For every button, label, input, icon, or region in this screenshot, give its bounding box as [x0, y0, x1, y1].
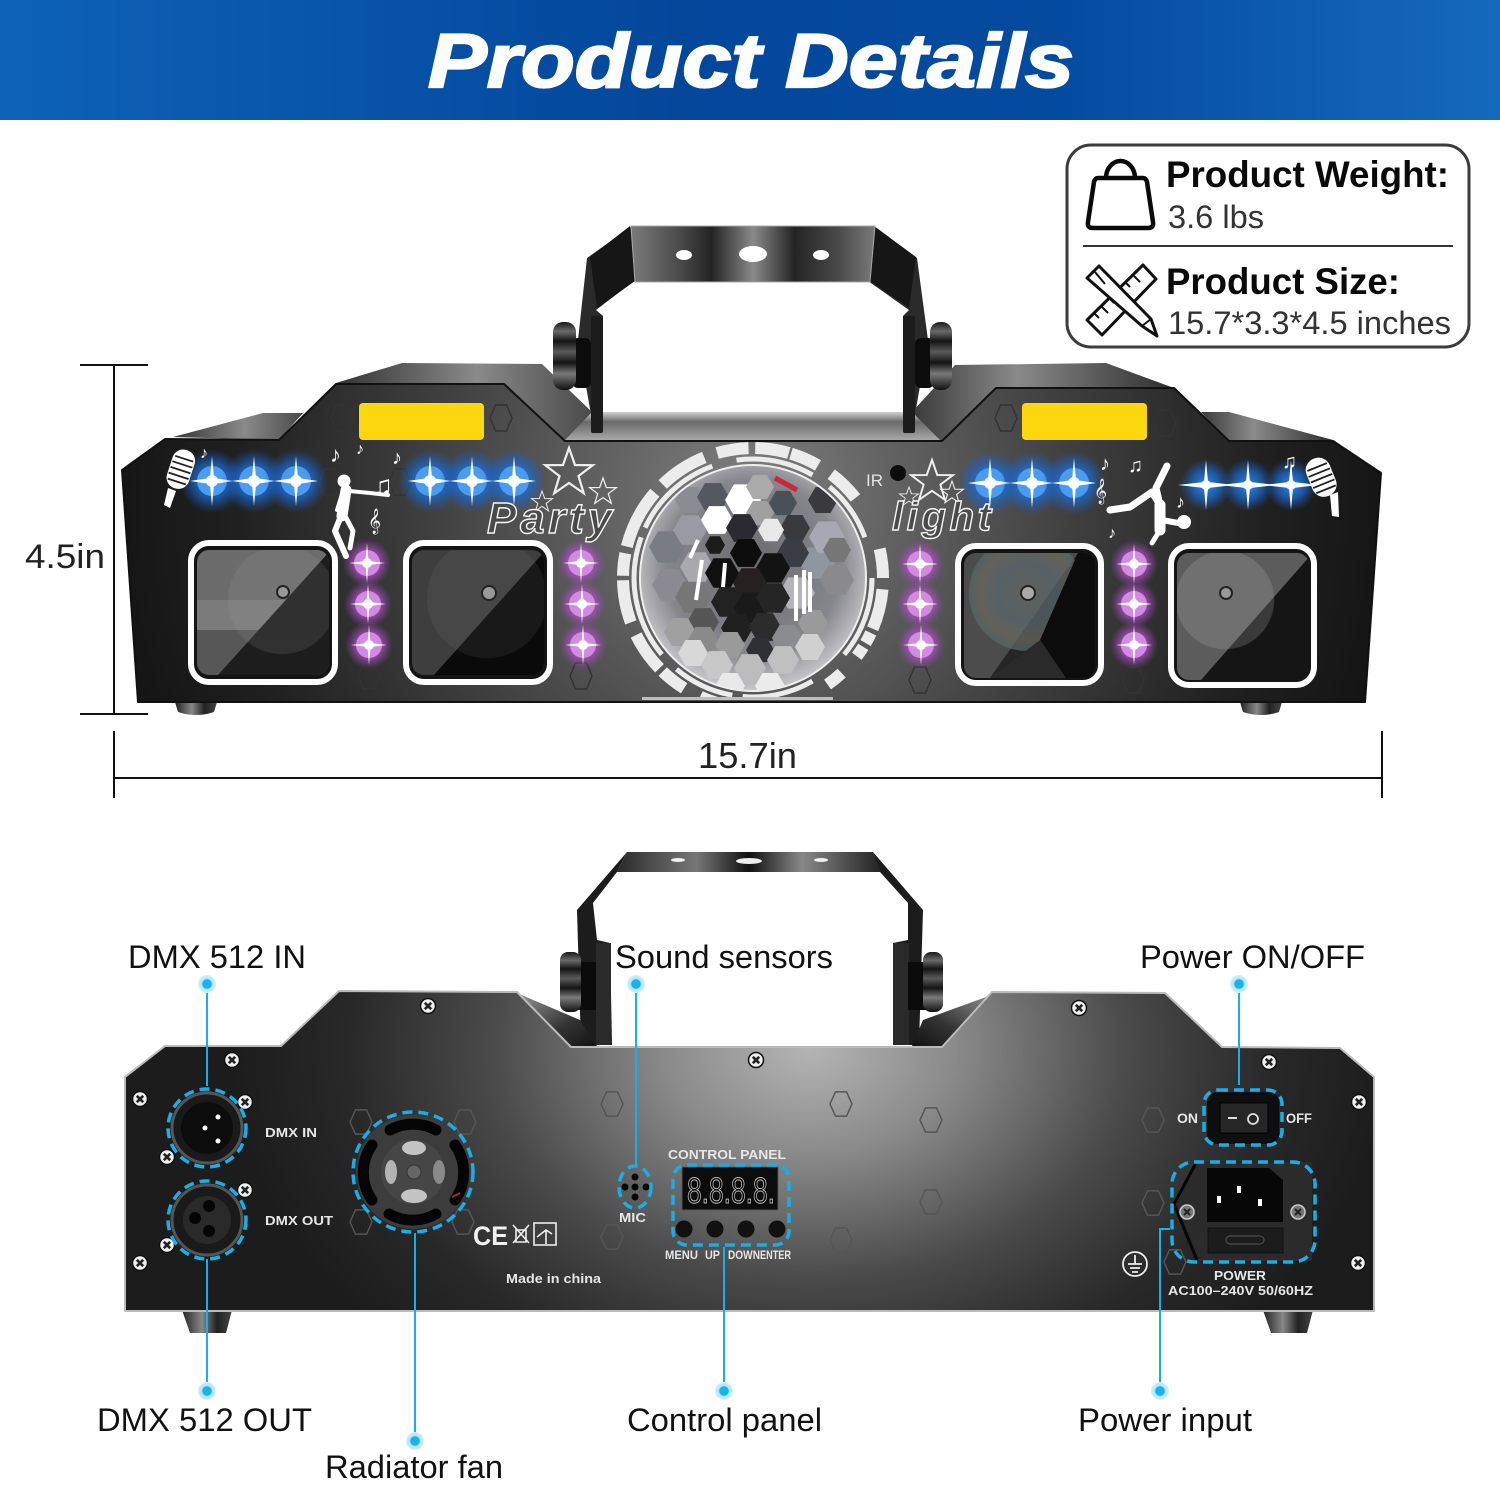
feet [175, 702, 1282, 715]
rear panel [125, 991, 1374, 1311]
rear view of light [125, 852, 1374, 1333]
knobs [553, 322, 952, 390]
icon: dancer [335, 474, 388, 556]
dimension: height [25, 365, 148, 714]
icon: music notes group: 𝄞 [368, 508, 381, 534]
callout lines [207, 984, 1239, 1441]
rear side wedges [517, 993, 997, 1047]
icon: music notes group: ♫ [1128, 455, 1143, 477]
control buttons [676, 1220, 786, 1238]
icon: music notes group: 𝄞 [1094, 478, 1107, 504]
text: power rating [1168, 1268, 1313, 1298]
connector: DMX in [172, 1093, 242, 1163]
party decoration: right [866, 451, 1340, 543]
icon: weight [1088, 161, 1153, 228]
mounting bracket [577, 852, 923, 1045]
icon: music notes group: ♫ [1282, 451, 1297, 473]
power inlet [1174, 1162, 1312, 1261]
knobs [560, 952, 943, 1012]
icon: music notes group: ♪ [1176, 492, 1185, 512]
icon: music notes group: ♪ [1108, 525, 1116, 542]
text: ON: ON [1177, 1110, 1198, 1126]
icon: music notes group: ♪ [356, 441, 364, 458]
text: weight value: 3.6 lbs [1168, 199, 1264, 235]
text: control panel: CONTROL PANEL [668, 1147, 786, 1162]
screws [132, 998, 1366, 1270]
disco ball rings [623, 448, 883, 708]
button labels: ENTER [760, 1248, 791, 1262]
label: power on/off: Power ON/OFF [1140, 939, 1365, 975]
front view of light [122, 226, 1381, 715]
blue LEDs [180, 449, 1319, 515]
title: Product Details [428, 19, 1074, 104]
lens window 3 [958, 535, 1101, 683]
top side surfaces [173, 316, 1333, 442]
icon: music notes group: ♫ [372, 470, 393, 501]
dimension: width [114, 731, 1382, 798]
faint hex decorations [350, 1092, 1186, 1274]
icon: dancer [1110, 466, 1191, 543]
icon: microphone [1302, 454, 1340, 517]
text: power rating: AC100–240V 50/60HZ [1168, 1283, 1313, 1298]
text: height value: 4.5in [25, 538, 105, 576]
lens window 2 [406, 538, 550, 682]
label: DMX 512 OUT: DMX 512 OUT [97, 1402, 312, 1438]
bottom bar [642, 697, 833, 700]
label: radiator fan: Radiator fan [325, 1449, 503, 1485]
power switch [1207, 1092, 1279, 1144]
callout dots [198, 975, 1248, 1450]
icon: ground symbol [1123, 1252, 1147, 1276]
text: size value: 15.7*3.3*4.5 inches [1168, 305, 1451, 341]
icon: music notes: ♪ [200, 445, 208, 462]
text: light: light [892, 495, 993, 539]
label: sound sensors: Sound sensors [615, 939, 833, 975]
IR sensor [890, 465, 906, 481]
party decoration: left [164, 441, 616, 556]
display: digits [682, 1167, 778, 1211]
button labels [665, 1248, 791, 1262]
feet [182, 1310, 1313, 1333]
icon: music notes group [330, 441, 402, 534]
label: power input: Power input [1078, 1402, 1252, 1438]
icon: music notes group [1094, 451, 1297, 542]
mounting bracket [578, 226, 928, 432]
button labels: DOWN [728, 1248, 760, 1262]
text: width value: 15.7in [698, 735, 797, 776]
panel: product specifications [1067, 145, 1469, 347]
text: OFF: OFF [1286, 1110, 1312, 1126]
display: digits: 8.8.8.8. [687, 1170, 775, 1211]
icon: music notes group: ♪ [392, 447, 402, 469]
text: made in china: Made in china [506, 1271, 602, 1286]
text: DMX OUT: DMX OUT [265, 1213, 333, 1228]
connector: DMX out [172, 1185, 242, 1255]
text: product size heading: Product Size: [1166, 261, 1400, 302]
lens window 4 [1171, 546, 1314, 685]
icon: music notes group: ♪ [1100, 453, 1110, 475]
front face panel [122, 384, 1381, 702]
yellow strobe bars [359, 403, 1147, 440]
text: MIC: MIC [619, 1210, 647, 1225]
text: DMX IN: DMX IN [265, 1125, 317, 1140]
label: DMX 512 IN: DMX 512 IN [128, 939, 306, 975]
icon: ruler and pencil [1087, 265, 1157, 336]
faint hex decorations [319, 405, 1176, 693]
disco ball [640, 465, 866, 699]
icon: compliance marks [513, 1223, 556, 1245]
text: product weight heading: Product Weight: [1166, 154, 1449, 195]
text: power rating: POWER [1214, 1268, 1267, 1283]
icon: microphone holes [622, 1174, 650, 1200]
button labels: MENU [665, 1248, 698, 1262]
purple LEDs [343, 539, 1158, 669]
text: Party: Party [487, 494, 615, 543]
icon: microphone [164, 447, 198, 508]
icon: stars [532, 448, 616, 511]
text: IR: IR [866, 471, 883, 490]
button labels: UP [705, 1248, 720, 1262]
icon: music notes group: ♪ [330, 442, 341, 467]
icon: radiator fan [356, 1115, 470, 1229]
callout highlights: dashed outlines [168, 1089, 1315, 1262]
icon: stars [900, 460, 963, 505]
label: control panel: Control panel [627, 1402, 822, 1438]
lens window 1 [191, 543, 336, 682]
text: CE: CE [473, 1221, 508, 1251]
header banner [0, 0, 1500, 120]
